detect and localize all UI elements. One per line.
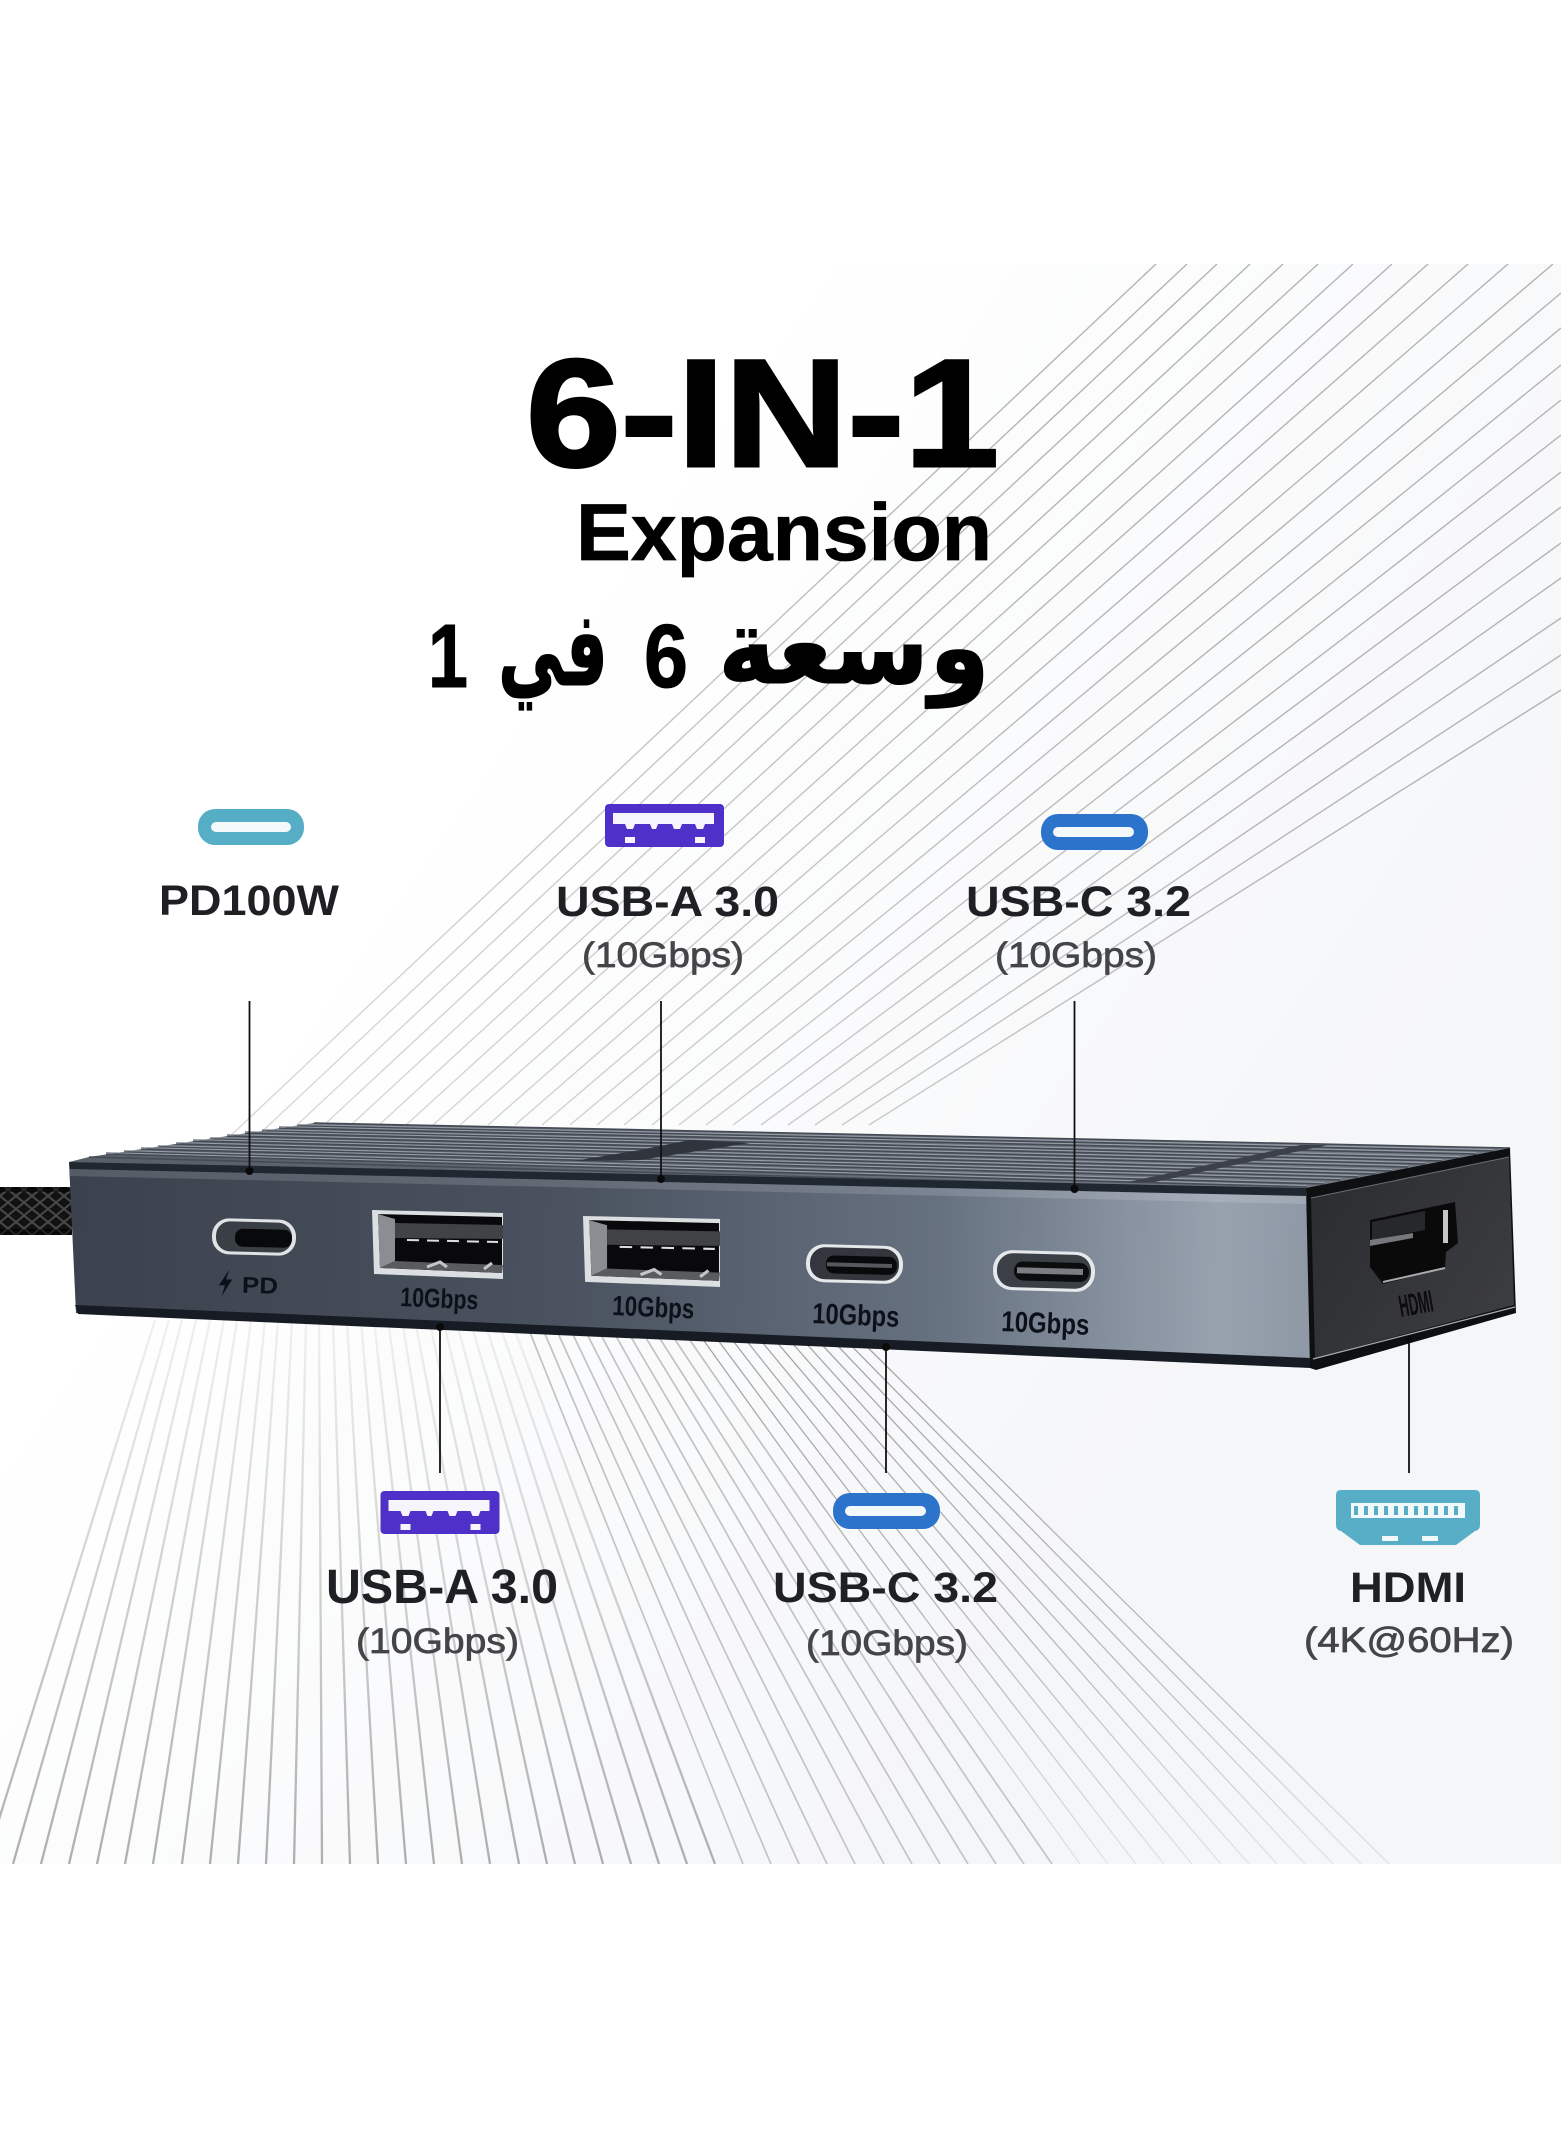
port: USB-C PD xyxy=(212,1218,296,1256)
port: USB-C 1 xyxy=(806,1244,903,1284)
hub front face xyxy=(69,1162,1311,1368)
label: PD with bolt xyxy=(219,1269,278,1299)
icon: USB-C top xyxy=(1041,814,1148,850)
leader line: USB-C top xyxy=(1070,1001,1078,1193)
hub speed label 2: 10Gbps xyxy=(612,1290,695,1325)
logo on top face xyxy=(574,1140,750,1161)
label: PD with bolt: PD xyxy=(242,1272,278,1299)
panel: light gradient background xyxy=(0,264,1561,1864)
icon: HDMI xyxy=(1336,1490,1480,1545)
leader line: PD100W xyxy=(246,1001,254,1175)
subtitle: Arabic xyxy=(428,586,990,710)
label: USB-C 3.2 top: USB-C 3.2 xyxy=(966,878,1191,926)
hub speed label 4: 10Gbps xyxy=(1001,1306,1090,1342)
hub top face with fins xyxy=(69,1123,1510,1190)
icon: PD USB-C port xyxy=(198,809,304,845)
hub cable xyxy=(0,1187,72,1235)
hub side face xyxy=(1306,1148,1516,1370)
sublabel: 4K@60Hz: (4K@60Hz) xyxy=(1304,1621,1514,1660)
background: lower line fan xyxy=(0,1320,1389,1864)
leader line: USB-A bottom xyxy=(436,1323,444,1473)
subtitle: Arabic: 1 xyxy=(428,607,468,707)
hub side face: HDMI xyxy=(1396,1284,1436,1324)
port: USB-C 2 xyxy=(992,1250,1096,1292)
sublabel: 10Gbps top A: (10Gbps) xyxy=(582,936,744,975)
leader line: HDMI xyxy=(1406,1336,1412,1473)
sublabel: 10Gbps bottom A: (10Gbps) xyxy=(356,1622,519,1661)
label: USB-C 3.2 bottom: USB-C 3.2 xyxy=(773,1564,998,1612)
subtitle: Expansion: Expansion xyxy=(576,488,992,578)
dark band on top face xyxy=(1128,1145,1328,1182)
leader line: USB-C bottom xyxy=(882,1343,890,1473)
background: upper line fan xyxy=(226,264,1561,1140)
subtitle: Arabic: وسعة xyxy=(718,586,990,709)
sublabel: 10Gbps top C: (10Gbps) xyxy=(995,936,1157,975)
icon: USB-A bottom xyxy=(380,1491,500,1534)
label: USB-A 3.0 bottom: USB-A 3.0 xyxy=(326,1561,558,1614)
icon: USB-A top xyxy=(605,804,724,847)
hub speed label 3: 10Gbps xyxy=(812,1298,900,1334)
leader line: USB-A top xyxy=(657,1001,665,1183)
title: 6-IN-1: 6-IN-1 xyxy=(526,328,999,499)
sublabel: 10Gbps bottom C: (10Gbps) xyxy=(806,1624,968,1663)
HDMI port xyxy=(1370,1202,1458,1284)
hub speed label 1: 10Gbps xyxy=(400,1282,479,1315)
subtitle: Arabic: 6 xyxy=(644,607,688,707)
port: USB-A 1 xyxy=(372,1210,503,1279)
icon: USB-C bottom xyxy=(833,1493,940,1529)
label: HDMI: HDMI xyxy=(1350,1564,1466,1612)
label: PD100W: PD100W xyxy=(159,877,339,925)
port: USB-A 2 xyxy=(583,1216,720,1287)
USB hub device xyxy=(69,1123,1516,1370)
label: USB-A 3.0 top: USB-A 3.0 xyxy=(556,878,779,926)
subtitle: Arabic: في xyxy=(498,588,608,710)
